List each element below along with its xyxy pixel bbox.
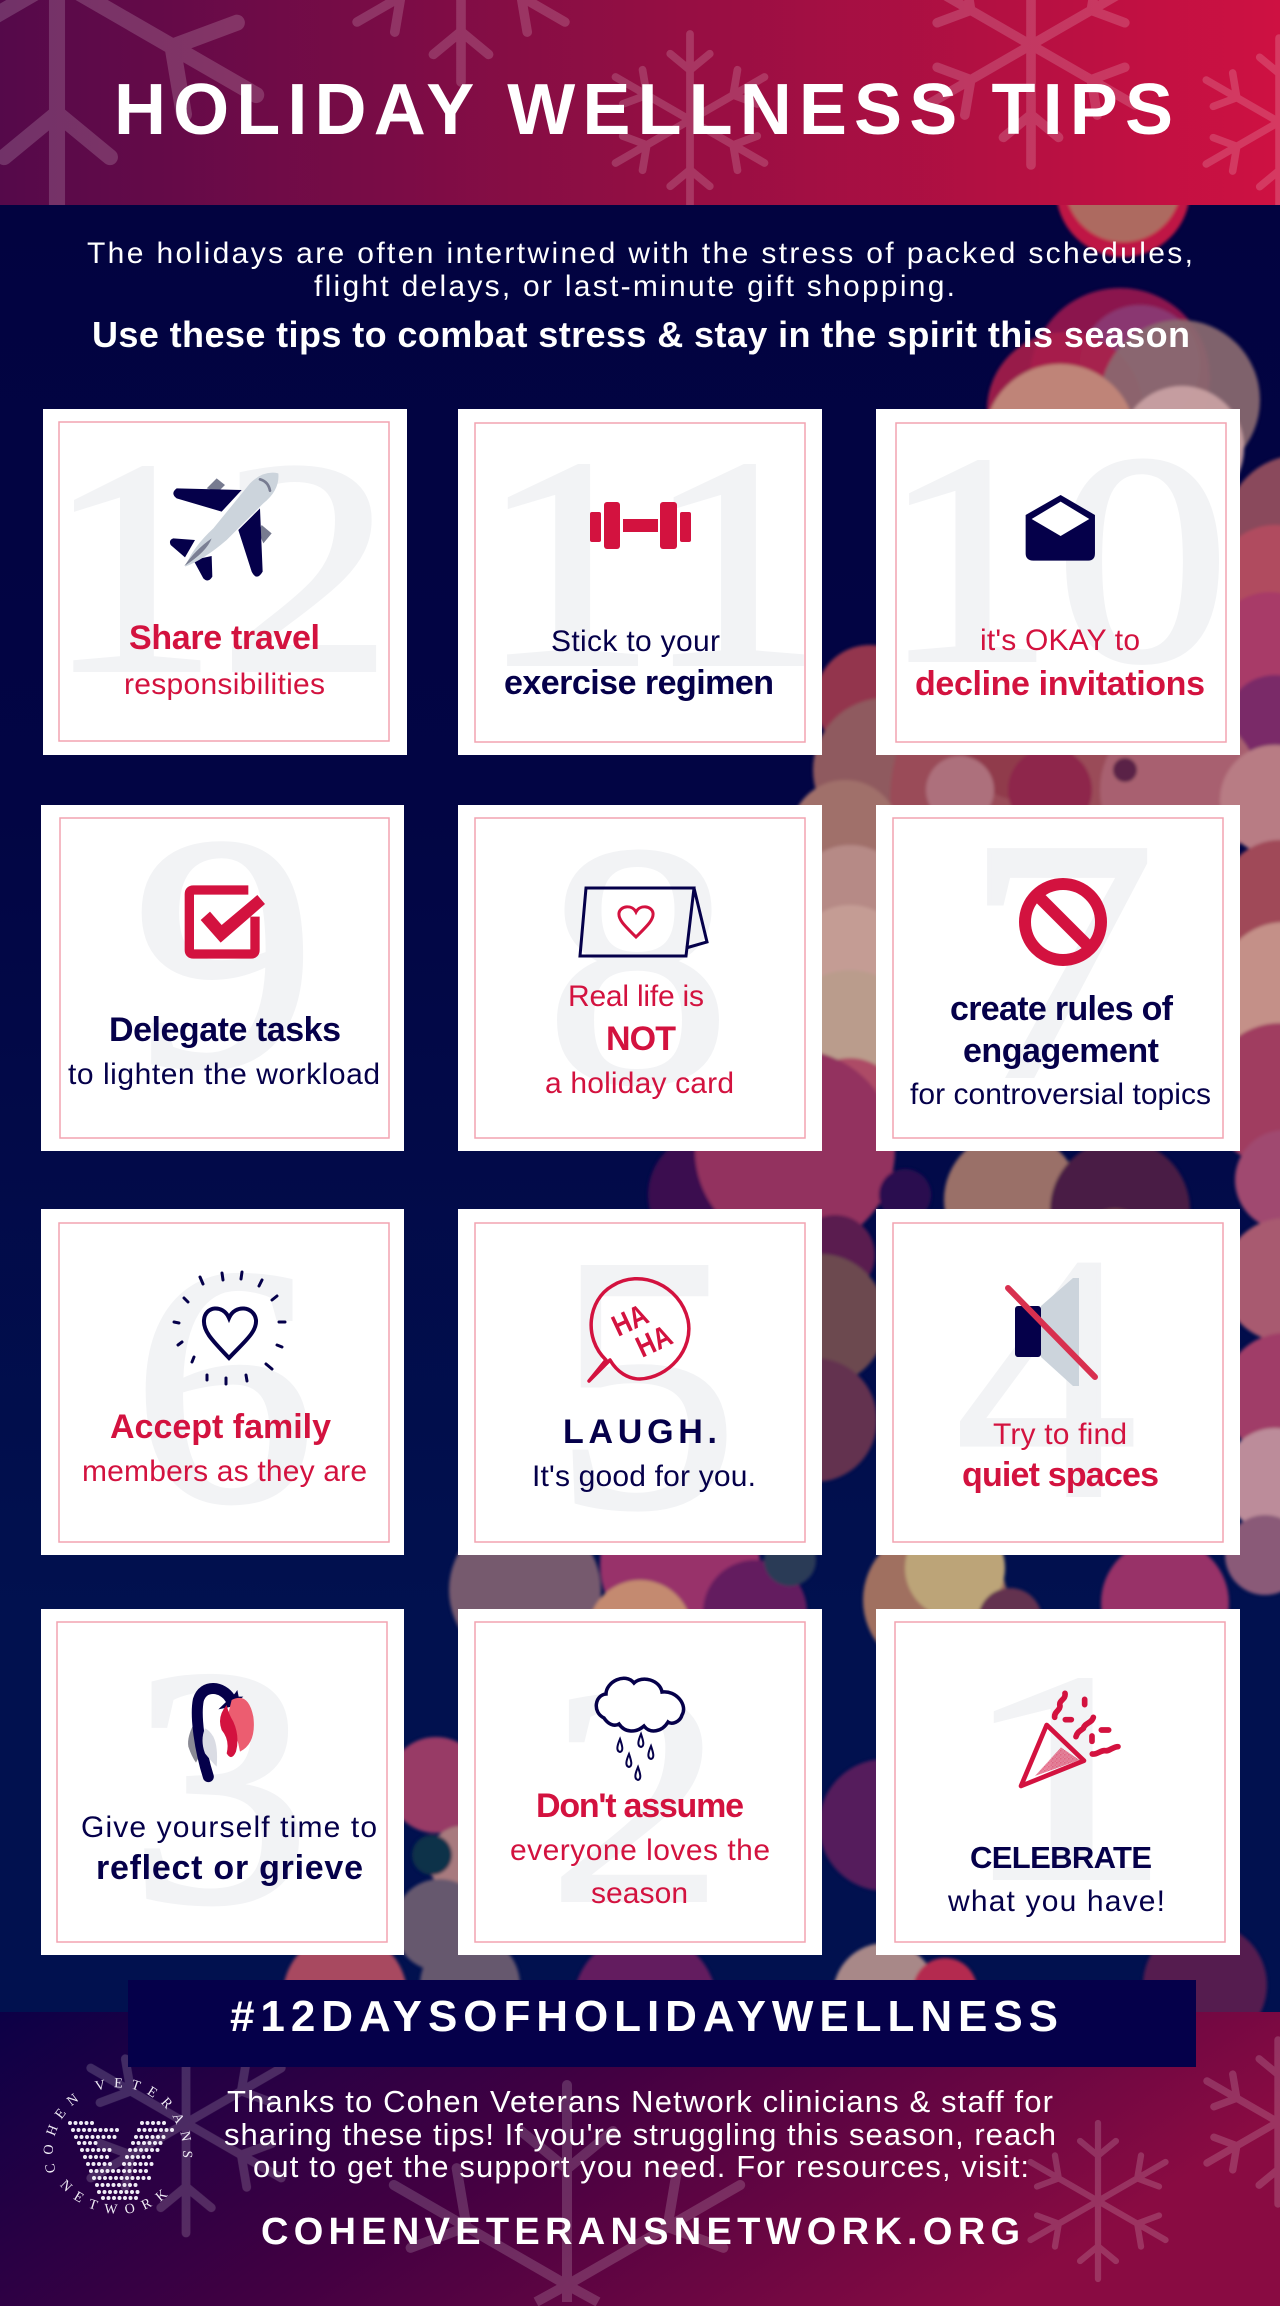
footer message: out to get the support you need. For resources, visit: [253, 2149, 1029, 2184]
card 8: real life is not a holiday card: NOT [606, 1020, 676, 1058]
card 4: quiet spaces: quiet spaces [962, 1456, 1159, 1494]
card 3: reflect or grieve: Give yourself time to [81, 1811, 377, 1844]
icon: open envelope [1026, 495, 1095, 561]
card 11: exercise regimen: Stick to your [551, 625, 720, 658]
card 8: real life is not a holiday card [458, 774, 822, 1156]
card 5: laugh: LAUGH. [563, 1413, 717, 1451]
card 10: decline invitations: 10 [880, 393, 1230, 725]
card 8: real life is not a holiday card: 8 [545, 774, 731, 1156]
card 2: don't assume [458, 1609, 822, 1968]
logo: Cohen Veterans Network [44, 2078, 192, 2214]
footer panel [0, 2012, 1280, 2306]
card 7: rules of engagement: for controversial topics [910, 1078, 1211, 1111]
card 7: rules of engagement [876, 769, 1240, 1151]
card 6: accept family: members as they are [82, 1455, 367, 1488]
icon: dumbbell [590, 502, 691, 549]
card 12: share travel: responsibilities [124, 668, 325, 701]
card 1: celebrate [876, 1609, 1240, 1955]
icon: speech bubble with HA HA: HA [607, 1298, 654, 1343]
card 3: reflect or grieve [41, 1598, 404, 1975]
icon: party popper [1021, 1693, 1118, 1786]
card 2: don't assume: season [591, 1877, 688, 1910]
card 2: don't assume: 2 [548, 1625, 724, 1968]
card 2: don't assume: everyone loves the [510, 1834, 770, 1867]
card 9: delegate tasks [41, 767, 404, 1151]
card 9: delegate tasks: Delegate tasks [109, 1011, 341, 1049]
card 1: celebrate: 1 [958, 1611, 1173, 1943]
icon: speech bubble with HA HA: HA [631, 1319, 678, 1364]
card 12: share travel: 12 [45, 398, 393, 737]
card 5: laugh: It's good for you. [532, 1460, 756, 1493]
card 7: rules of engagement: 7 [964, 769, 1156, 1151]
title: HOLIDAY WELLNESS TIPS [114, 70, 1173, 150]
icon: speech bubble with HA HA [589, 1279, 689, 1381]
card 4: quiet spaces: 4 [955, 1183, 1137, 1571]
card 6: accept family: Accept family [110, 1408, 331, 1446]
icon: rain cloud [596, 1678, 684, 1780]
hashtag banner [128, 1980, 1196, 2067]
card 8: real life is not a holiday card: Real life is [568, 980, 704, 1013]
card 3: reflect or grieve: reflect or grieve [96, 1849, 363, 1887]
hashtag banner: #12DAYSOFHOLIDAYWELLNESS [230, 1992, 1058, 2041]
card 1: celebrate: CELEBRATE [970, 1840, 1152, 1875]
footer message [224, 2084, 1056, 2184]
logo: Cohen Veterans Network: NETWORK [60, 2179, 168, 2214]
website URL: COHENVETERANSNETWORK.ORG [261, 2211, 1020, 2253]
card 9: delegate tasks: 9 [132, 767, 316, 1138]
footer message: sharing these tips! If you're struggling this season, reach [224, 2117, 1056, 2152]
header banner [0, 0, 1280, 210]
card 4: quiet spaces: Try to find [993, 1418, 1127, 1451]
card 5: laugh: 5 [553, 1181, 739, 1585]
card 10: decline invitations: it's OKAY to [980, 624, 1140, 657]
card 1: celebrate: what you have! [947, 1885, 1165, 1918]
card 4: quiet spaces [876, 1183, 1240, 1571]
card 2: don't assume: Don't assume [536, 1787, 744, 1825]
header snowflakes [0, 0, 1280, 210]
icon: checkbox [189, 890, 265, 954]
card 11: exercise regimen: exercise regimen [504, 664, 774, 702]
card 8: real life is not a holiday card: a holiday card [545, 1067, 734, 1100]
intro text: The holidays are often intertwined with the stress of packed schedules, [87, 237, 1193, 270]
card 5: laugh [458, 1181, 822, 1585]
card 9: delegate tasks: to lighten the workload [68, 1058, 380, 1091]
footer snowflakes [78, 2013, 1280, 2306]
card 6: accept family: 6 [132, 1197, 316, 1574]
intro text [87, 237, 1193, 355]
icon: airplane [170, 473, 278, 580]
icon: heart with rays [174, 1272, 285, 1384]
card 11: exercise regimen: 11 [478, 397, 823, 729]
footer message: Thanks to Cohen Veterans Network clinicians & staff for [227, 2084, 1053, 2119]
icon: greeting card [580, 888, 707, 956]
card 7: rules of engagement: create rules of [950, 990, 1174, 1028]
card 10: decline invitations: decline invitations [915, 665, 1205, 703]
intro text: flight delays, or last-minute gift shopping. [314, 270, 955, 303]
card 12: share travel: Share travel [129, 619, 320, 657]
icon: muted speaker [1008, 1278, 1095, 1386]
card 6: accept family [41, 1197, 404, 1574]
card 3: reflect or grieve: 3 [129, 1598, 311, 1975]
card 7: rules of engagement: engagement [963, 1032, 1159, 1070]
icon: prohibition sign [1025, 884, 1101, 960]
logo: Cohen Veterans Network: COHEN VETERANS [44, 2078, 192, 2173]
intro text: Use these tips to combat stress & stay in the spirit this season [92, 314, 1190, 355]
icon: wilted flower [188, 1689, 254, 1777]
